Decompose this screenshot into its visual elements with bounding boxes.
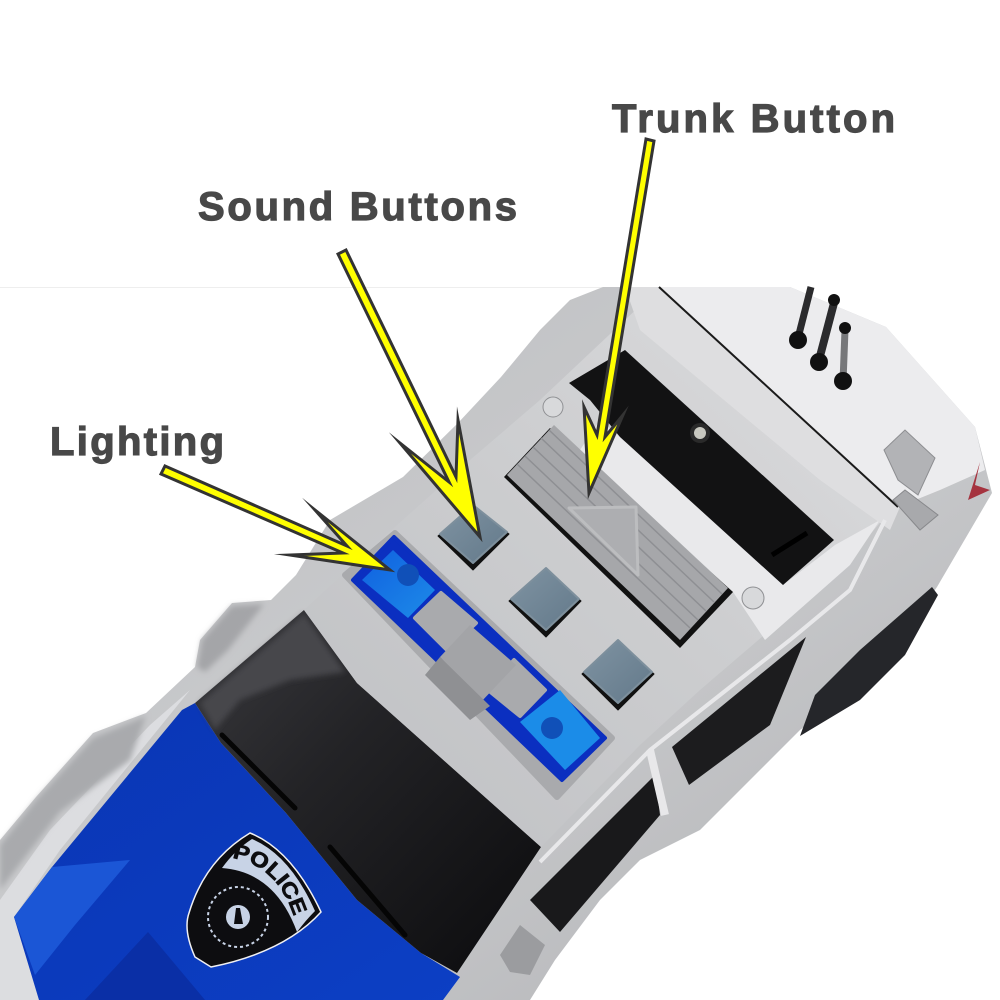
side mirror — [500, 925, 545, 975]
blue housing — [353, 537, 605, 780]
panel ribs — [517, 430, 722, 628]
upper fender bump — [197, 604, 264, 672]
right lens — [520, 690, 600, 770]
label: Sound Buttons: Sound Buttons — [198, 185, 517, 229]
rear hinges — [884, 430, 938, 530]
left slide tab — [415, 593, 476, 650]
antenna two — [810, 294, 840, 371]
speaker grille right — [541, 717, 563, 739]
black trunk cavity — [569, 350, 834, 585]
badge wording: POLICE — [233, 845, 308, 916]
wiper two — [330, 847, 405, 935]
screw — [690, 423, 710, 443]
badge ring — [208, 887, 268, 947]
triangle icon on trunk button — [569, 507, 638, 575]
hood highlight — [14, 860, 130, 975]
blue hood — [14, 703, 460, 1000]
antenna three — [834, 322, 852, 390]
sound button two — [509, 568, 581, 637]
arrow: sound buttons — [338, 250, 480, 537]
label: Lighting: Lighting — [50, 420, 224, 464]
cavity slot — [772, 533, 807, 555]
light bar surround — [345, 533, 612, 797]
antenna one — [789, 287, 811, 349]
bright strip beside trunk panel — [580, 420, 880, 640]
door frame — [540, 520, 885, 862]
left front fender highlight — [0, 690, 190, 1000]
speaker grille left — [397, 564, 419, 586]
label: Trunk Button: Trunk Button — [612, 97, 895, 141]
front door window — [530, 775, 660, 932]
roof panel — [304, 287, 895, 847]
police badge — [186, 832, 322, 968]
left lens — [362, 550, 435, 618]
badge tower — [234, 908, 243, 924]
rear door window — [672, 637, 806, 785]
sound button one — [438, 505, 509, 570]
arrow: trunk button — [584, 139, 654, 493]
upper trunk deck — [625, 287, 900, 530]
windshield — [195, 610, 541, 973]
police car — [0, 286, 992, 1000]
arrow: lighting — [161, 466, 390, 570]
hood scoop — [85, 932, 205, 1000]
badge upper band — [222, 839, 315, 932]
roof bolts — [543, 397, 764, 609]
door pillar — [650, 750, 665, 815]
sound button three — [582, 640, 654, 710]
centre block — [440, 625, 516, 702]
car body shell — [0, 287, 992, 1000]
sound buttons — [438, 505, 654, 710]
left wheel arch bump — [0, 716, 146, 890]
rear deck — [660, 287, 985, 507]
tail light — [968, 462, 990, 500]
antenna group — [789, 287, 852, 390]
photo backdrop divider — [0, 287, 620, 288]
badge shield — [187, 833, 321, 967]
badge inner seal — [226, 905, 250, 929]
light bar — [345, 533, 612, 797]
trunk seam — [659, 287, 898, 507]
trunk button panel — [504, 425, 733, 648]
ribbed clip — [425, 657, 490, 720]
wiper one — [222, 735, 295, 808]
windshield reflection — [200, 614, 345, 730]
right wheel — [800, 587, 938, 736]
right slide tab — [488, 660, 545, 716]
